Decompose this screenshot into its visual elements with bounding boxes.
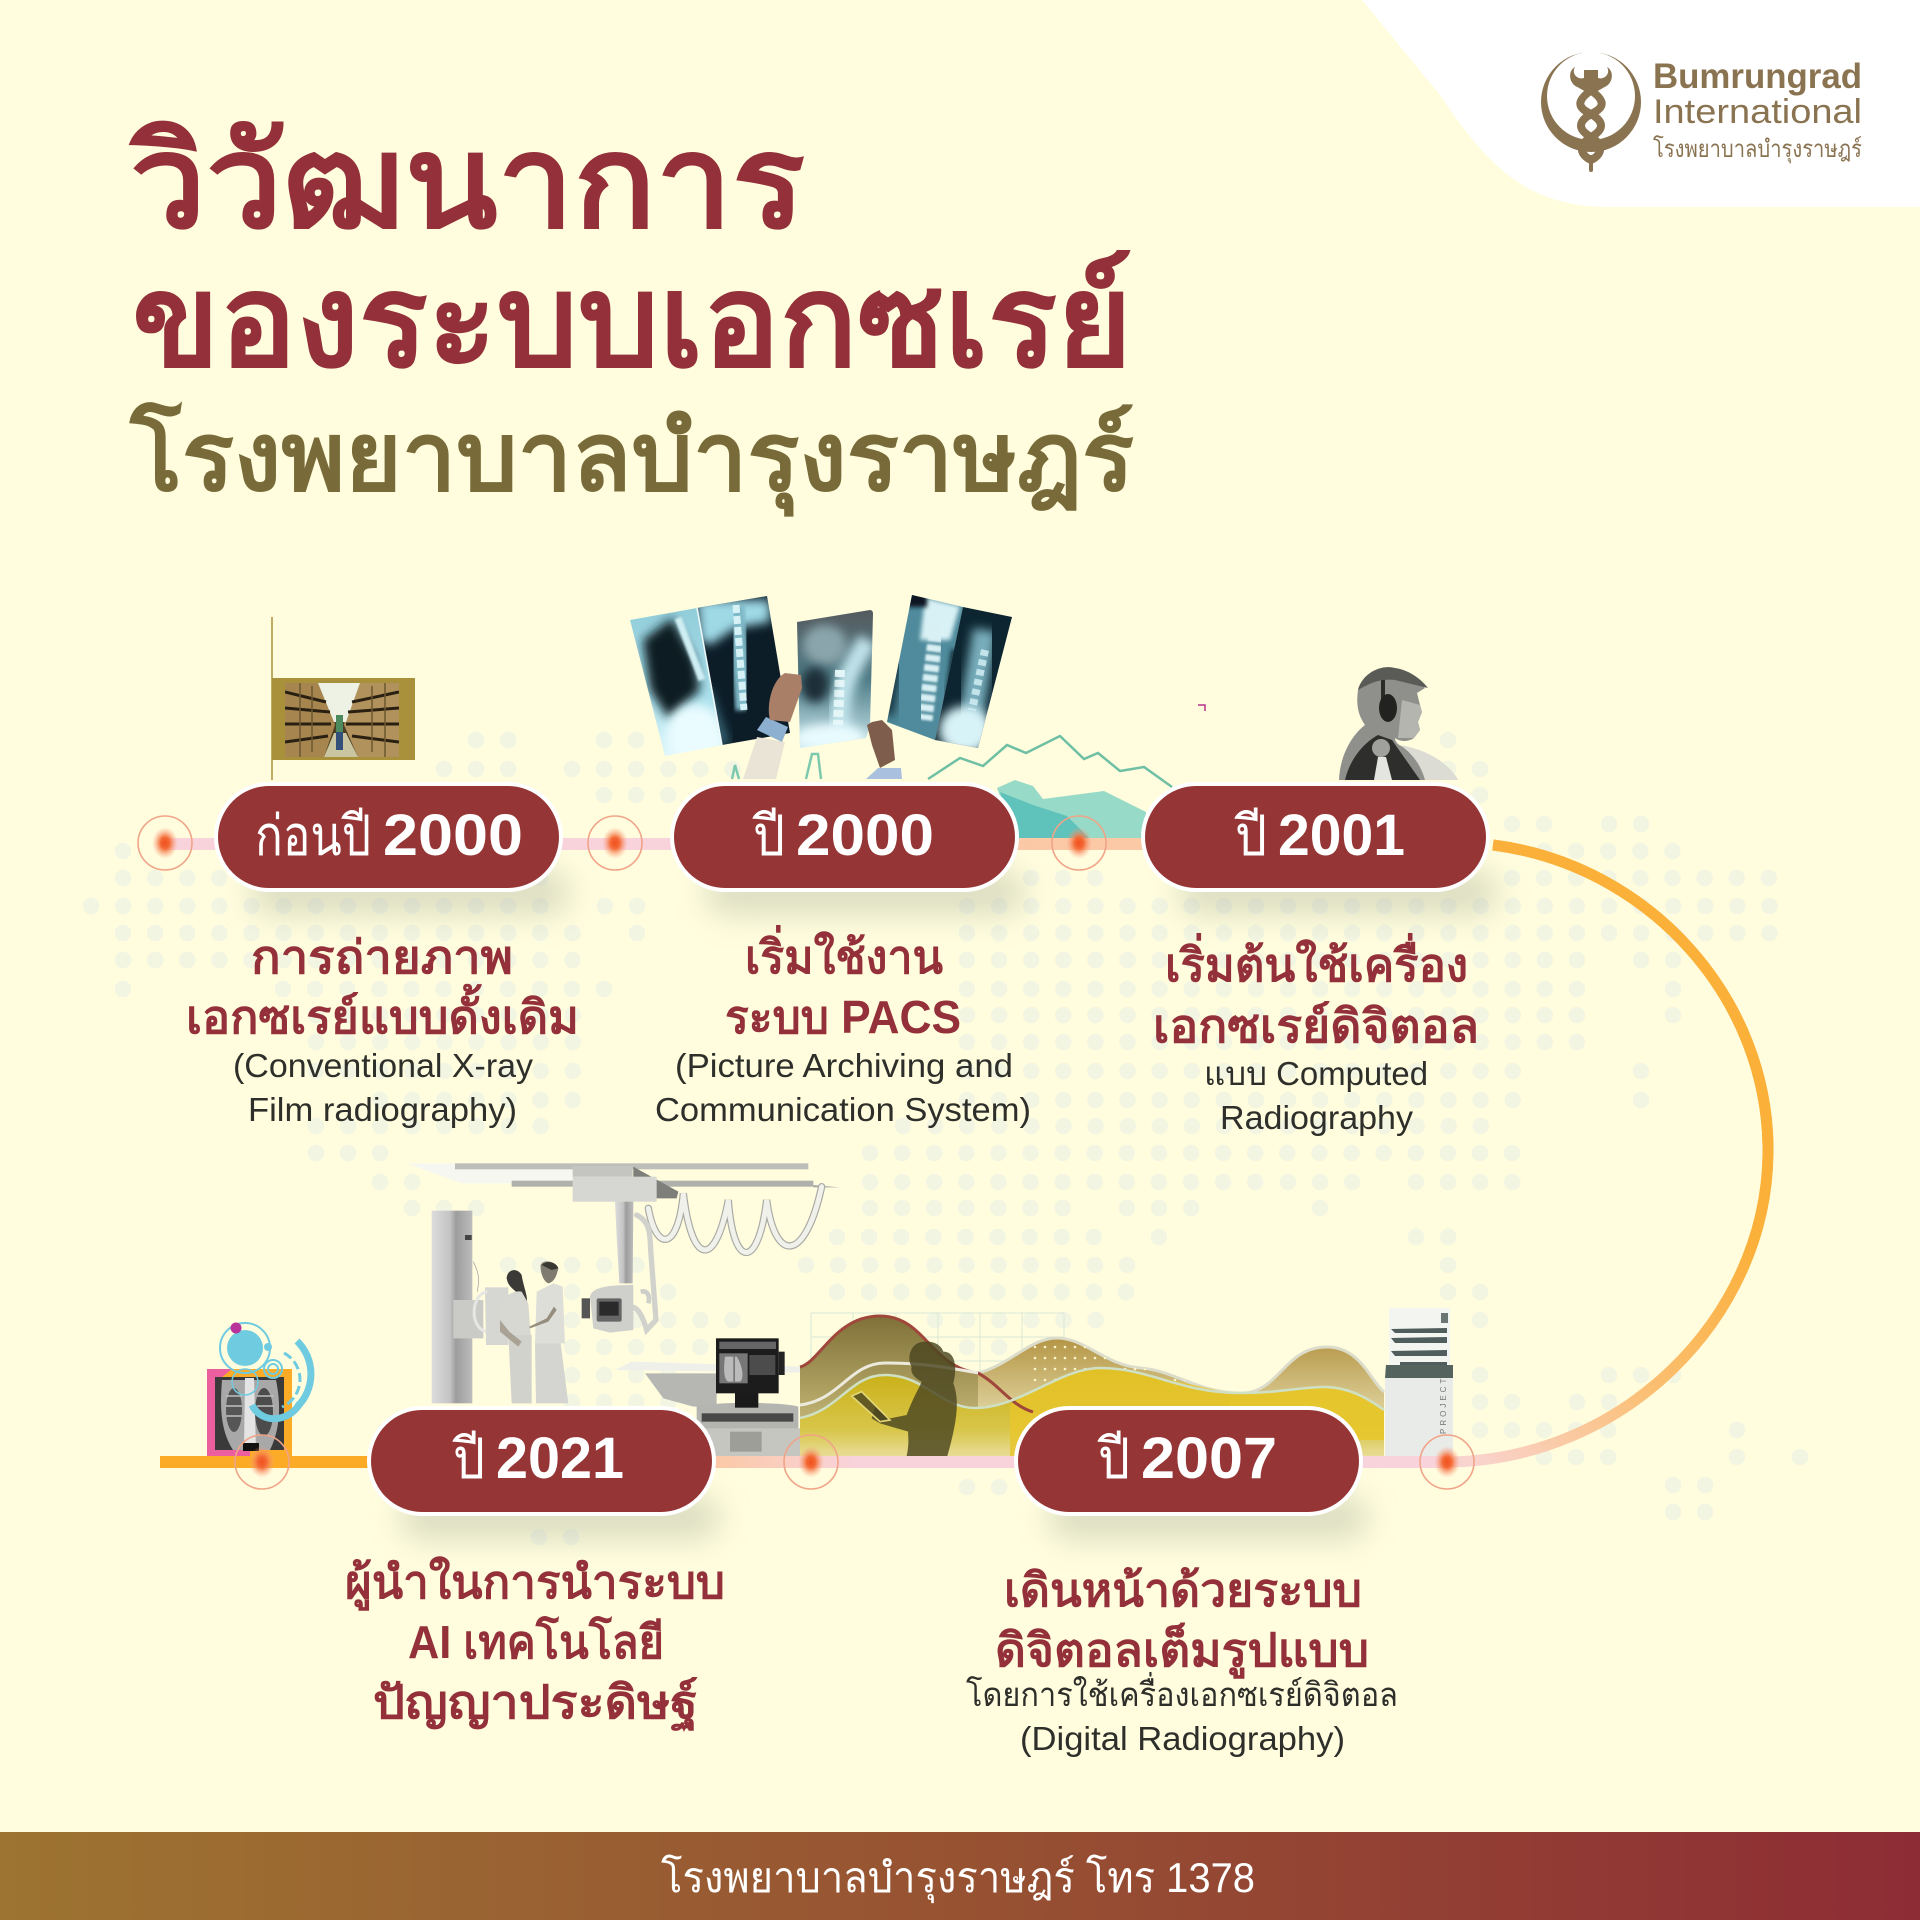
pill: 2021: 2021: [496, 1426, 624, 1491]
timeline bottom line: orange segment: [160, 1456, 370, 1468]
title: วิวัฒนาการ: [128, 109, 805, 255]
dotted world map background: [91, 740, 1801, 1537]
node 2000: [588, 816, 642, 870]
pill: 2000: [672, 784, 1017, 890]
logo: Bumrungrad International: [1541, 46, 1862, 172]
title: โรงพยาบาลบำรุงราษฎร์: [129, 402, 1134, 517]
x-ray film pair right: [887, 595, 963, 740]
text block: full digital radiography: เดินหน้าด้วยระบบ: [1004, 1564, 1362, 1616]
text block: computed radiography: Radiography: [1220, 1099, 1414, 1136]
pale contours: [800, 1363, 978, 1405]
text block: full digital radiography: ดิจิตอลเต็มรูปแบบ: [995, 1622, 1369, 1679]
pill: 2001: 2001: [1278, 803, 1405, 868]
teal mountains: [997, 780, 1146, 838]
ceiling rails: [407, 1163, 573, 1183]
chart grid: [811, 1313, 1064, 1456]
image: x-ray films held up: [620, 590, 1020, 779]
text block: AI technology: ปัญญาประดิษฐ์: [373, 1676, 698, 1732]
text block: conventional x-ray: การถ่ายภาพ: [251, 931, 513, 983]
woman silhouette: [852, 1341, 957, 1456]
text block: full digital radiography: โดยการใช้เครื่องเอกซเรย์ดิจิตอล: [966, 1672, 1398, 1713]
image: film archive room: [272, 617, 415, 780]
pill shadows: [250, 870, 1498, 1540]
title: ของระบบเอกซเรย์: [132, 248, 1132, 394]
text block: PACS: เริ่มใช้งาน: [745, 925, 944, 983]
pill: 2000: ปี: [752, 804, 785, 867]
text block: conventional x-ray: [186, 931, 579, 1128]
area chart with woman silhouette: [800, 1313, 1384, 1456]
technologist: [541, 1261, 558, 1283]
tan hills: [978, 1338, 1384, 1456]
text block: computed radiography: แบบ Computed: [1204, 1055, 1428, 1092]
pill: 2000: 2000: [796, 803, 934, 868]
text block: AI technology: [345, 1555, 725, 1732]
node 2001: [1052, 816, 1106, 870]
timeline nodes: [138, 816, 1474, 1489]
pill: 2007: 2007: [1141, 1426, 1277, 1491]
x-ray tube head: [590, 1285, 633, 1333]
text block: PACS: [655, 925, 1031, 1128]
logo wordmark: International: [1653, 93, 1862, 131]
console cart: [697, 1403, 798, 1440]
wall stand: [432, 1211, 472, 1403]
logo wordmark: Bumrungrad: [1653, 57, 1862, 96]
logo wordmark: โรงพยาบาลบำรุงราษฎร์: [1653, 135, 1862, 164]
AI circles and arcs: [220, 1322, 311, 1419]
pill: 2007: ปี: [1097, 1427, 1130, 1490]
pill: 2021: [369, 1408, 714, 1514]
x-ray film centre: [797, 610, 873, 748]
white corner panel: [1362, 0, 1920, 207]
x-ray AI panel: [207, 1322, 311, 1457]
text block: computed radiography: เอกซเรย์ดิจิตอล: [1153, 1000, 1479, 1052]
text block: PACS: ระบบ PACS: [725, 991, 961, 1043]
text block: conventional x-ray: เอกซเรย์แบบดั้งเดิม: [186, 983, 579, 1043]
text block: computed radiography: [1153, 933, 1479, 1136]
cables: [630, 1187, 822, 1330]
small teal traces: [732, 754, 821, 779]
pill: 2001: [1143, 784, 1488, 890]
text block: AI technology: ผู้นำในการนำระบบ: [345, 1555, 725, 1611]
image: man with headphones: [1339, 667, 1458, 780]
text block: PACS: (Picture Archiving and: [675, 1047, 1013, 1084]
pill: 2007: [1016, 1408, 1361, 1514]
text block: full digital radiography: [966, 1564, 1398, 1757]
patient: [507, 1270, 527, 1303]
title: [128, 109, 1134, 517]
pill: 2001: ปี: [1234, 804, 1267, 867]
logo emblem: [1541, 46, 1641, 172]
timeline curve: [1445, 845, 1768, 1462]
text block: PACS: Communication System): [655, 1091, 1031, 1128]
monitor: [735, 1392, 758, 1408]
exam table: [615, 1362, 805, 1373]
yellow wave: [800, 1368, 1384, 1456]
red contour: [800, 1316, 1033, 1412]
radiography room equipment: [407, 1163, 840, 1458]
logo wordmark: [1653, 57, 1862, 164]
pill: 2021: ปี: [452, 1427, 485, 1490]
text block: computed radiography: เริ่มต้นใช้เครื่อง: [1165, 933, 1468, 991]
doctor arms and hands: [743, 737, 785, 779]
teal line chart: [928, 736, 1172, 787]
text block: full digital radiography: (Digital Radiography): [1020, 1720, 1345, 1757]
pill: before 2000: ก่อนปี: [255, 804, 371, 867]
node before 2000: [138, 816, 192, 870]
image: film printer: [1385, 1308, 1453, 1456]
brown hill: [800, 1316, 1033, 1456]
text block: conventional x-ray: (Conventional X-ray: [233, 1047, 534, 1084]
node digital: [1420, 1435, 1474, 1489]
x-ray film pair left: [630, 608, 722, 756]
timeline top line: [165, 838, 1150, 850]
dotted texture: [1034, 1346, 1186, 1382]
footer text: โรงพยาบาลบำรุงราษฎร์ โทร 1378: [661, 1853, 1255, 1904]
ceiling tube column: [615, 1202, 633, 1283]
node 2021: [235, 1435, 289, 1489]
text block: AI technology: AI เทคโนโลยี: [408, 1615, 664, 1668]
text block: conventional x-ray: Film radiography): [248, 1091, 517, 1128]
timeline bottom line: pink segment: [715, 1456, 1450, 1468]
pill: before 2000: 2000: [383, 803, 523, 868]
node 2007: [784, 1435, 838, 1489]
pill: before 2000: [216, 784, 561, 890]
footer band: [0, 1832, 1920, 1920]
printer label: PROJECT: [1439, 1376, 1448, 1434]
small magenta corner mark: [1198, 705, 1205, 711]
